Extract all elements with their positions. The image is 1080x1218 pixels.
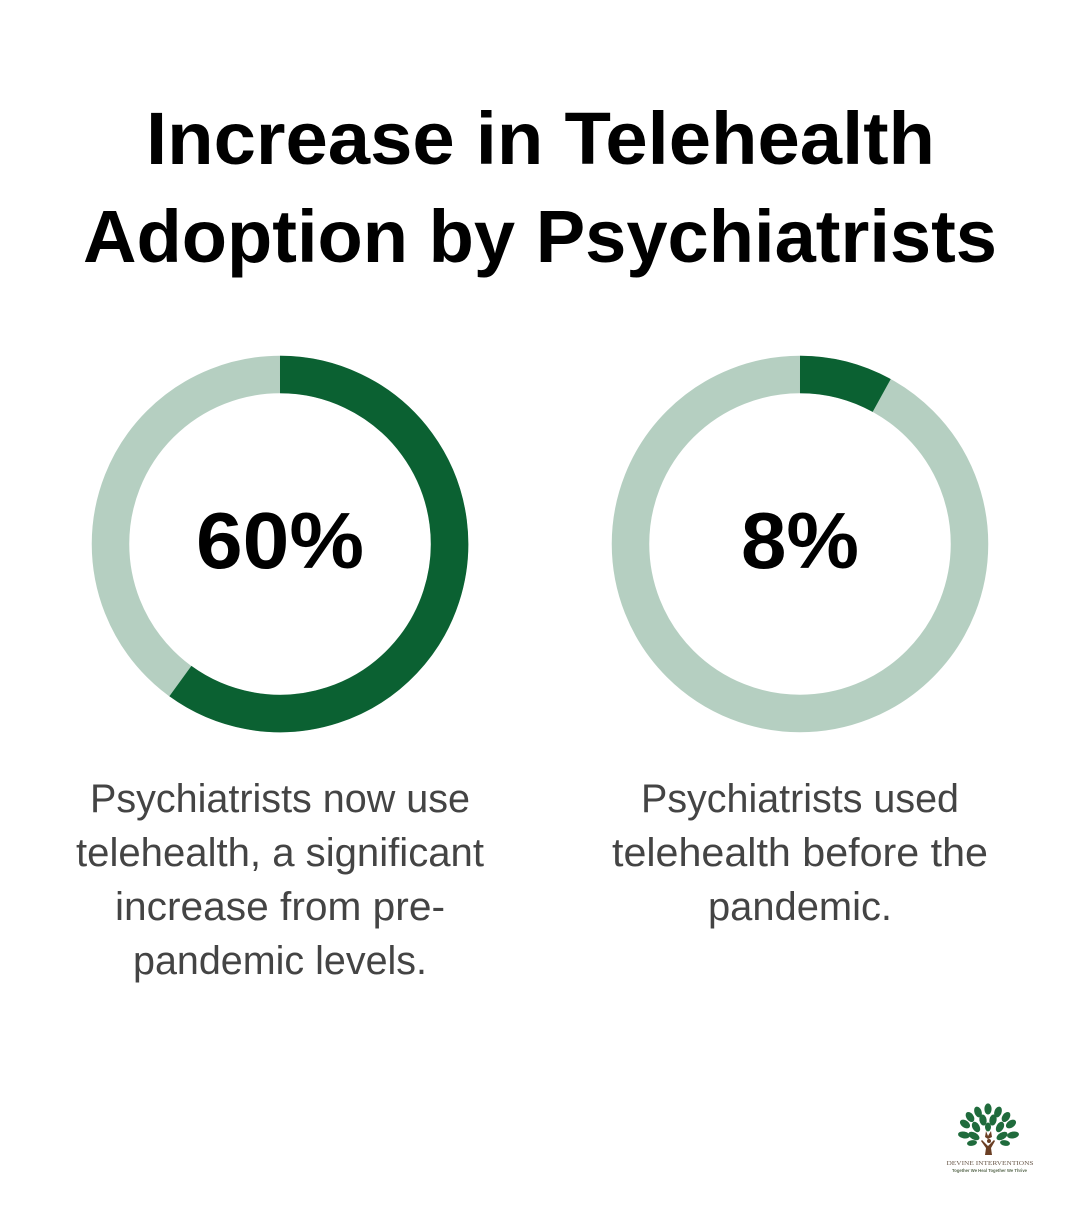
title: Adoption by Psychiatrists: [83, 195, 997, 278]
description: now use telehealth: Psychiatrists now use: [90, 777, 470, 821]
donut chart: 60%: [110, 374, 450, 714]
icon: tree: [958, 1103, 1019, 1155]
description: now use telehealth: increase from pre-: [115, 885, 445, 929]
title: [83, 97, 997, 278]
value: 60%: 60%: [196, 496, 364, 585]
description: used telehealth before: telehealth before the: [612, 831, 988, 875]
panel: 60% now: [76, 374, 484, 983]
description: now use telehealth: pandemic levels.: [133, 939, 427, 983]
description: now use telehealth: [76, 777, 484, 983]
description: now use telehealth: telehealth, a significant: [76, 831, 484, 875]
description: used telehealth before: [612, 777, 988, 929]
logo name: DEVINE INTERVENTIONS: [946, 1160, 1034, 1167]
description: used telehealth before: Psychiatrists used: [641, 777, 959, 821]
title: Increase in Telehealth: [146, 97, 935, 180]
description: used telehealth before: pandemic.: [708, 885, 892, 929]
donut chart: 8%: [630, 374, 970, 714]
value: 8%: 8%: [741, 496, 859, 585]
logo: Devine Interventions: [946, 1103, 1034, 1173]
logo tagline: Together We Heal Together We Thrive: [952, 1168, 1027, 1173]
panel: 8% before: [612, 374, 988, 929]
